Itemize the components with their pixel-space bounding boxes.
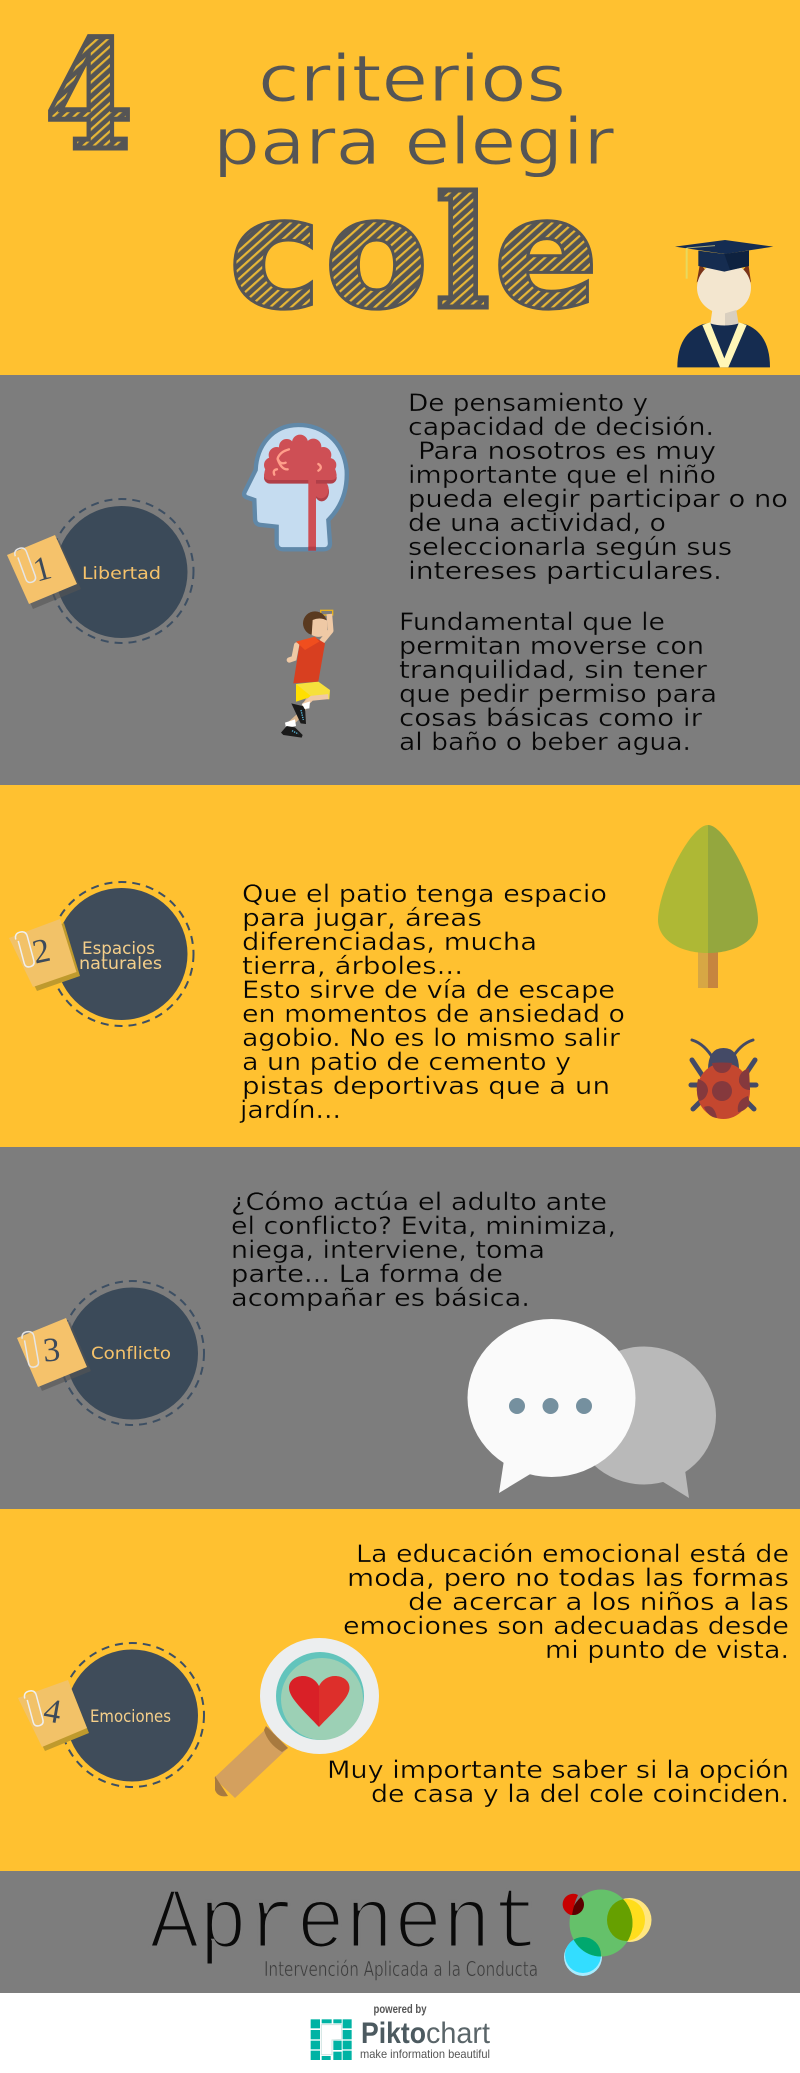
badge: Espacios naturales: Espacios bbox=[82, 939, 155, 959]
text: Que el patio: tierra, árboles... bbox=[242, 952, 463, 980]
big number 4: 4 bbox=[45, 8, 133, 184]
title line: para elegir: para elegir bbox=[213, 106, 615, 180]
text: De pensamiento: importante que el niño bbox=[408, 461, 716, 489]
text: De pensamiento: Para nosotros es muy bbox=[418, 437, 716, 465]
text: Muy importante bbox=[327, 1756, 789, 1808]
title word: cole: o bbox=[324, 165, 429, 344]
text: Cómo actúa bbox=[231, 1188, 616, 1312]
badge: Emociones bbox=[18, 1643, 204, 1787]
badge: Conflicto: 3 bbox=[41, 1331, 62, 1370]
icon: graduate bbox=[675, 240, 773, 367]
text: Cómo actúa: el conflicto? Evita, minimiza, bbox=[231, 1212, 616, 1240]
badge: Espacios naturales bbox=[9, 882, 194, 1026]
title line: criterios: criterios bbox=[258, 43, 566, 117]
text: La educación bbox=[343, 1540, 789, 1664]
text: Que el patio: a un patio de cemento y bbox=[242, 1048, 571, 1076]
panel: Piktochart credit bbox=[0, 1993, 800, 2073]
text: La educación: moda, pero no todas las formas bbox=[347, 1564, 789, 1592]
panel: 2 Espacios naturales bbox=[0, 785, 800, 1147]
text: Piktochart wordmark bbox=[361, 2017, 491, 2050]
icon: magnifier with heart bbox=[214, 1638, 379, 1798]
title word: cole: l bbox=[435, 163, 490, 344]
text: Fundamental: cosas básicas como ir bbox=[399, 704, 702, 732]
text: Muy importante: de casa y la del cole coinciden. bbox=[371, 1780, 789, 1808]
title word: cole: e bbox=[493, 165, 599, 344]
text: Fundamental: que pedir permiso para bbox=[399, 680, 717, 708]
badge: Libertad: Libertad bbox=[82, 564, 161, 584]
text: Que el patio: en momentos de ansiedad o bbox=[242, 1000, 625, 1028]
icon: ladybug bbox=[691, 1040, 756, 1119]
text: Fundamental: permitan moverse con bbox=[399, 632, 704, 660]
icon: speech bubbles bbox=[468, 1319, 716, 1498]
text: De pensamiento: seleccionarla según sus bbox=[408, 533, 732, 561]
text: Cómo actúa: parte... La forma de bbox=[231, 1260, 503, 1288]
text: Piktochart wordmark: Pikto bbox=[361, 2017, 426, 2050]
badge: Emociones: Emociones bbox=[90, 1707, 171, 1727]
badge: Conflicto: Conflicto bbox=[91, 1344, 171, 1364]
icon: tree bbox=[658, 825, 758, 988]
panel: Aprenent footer bbox=[0, 1871, 800, 1993]
text: La educación: emociones son adecuadas desde bbox=[343, 1612, 789, 1640]
text: Que el patio: jardín... bbox=[239, 1096, 341, 1124]
logo wordmark: Aprenent: Aprenent bbox=[150, 1875, 540, 1973]
text: Que el patio: Que el patio tenga espacio bbox=[242, 880, 607, 908]
icon: running boy bbox=[281, 610, 333, 738]
text: Piktochart wordmark: chart bbox=[426, 2017, 491, 2050]
badge: Emociones: 4 bbox=[41, 1692, 64, 1731]
text: Que el patio: diferenciadas, mucha bbox=[242, 928, 537, 956]
logo tagline: Intervención Aplicada a la Conducta bbox=[264, 1957, 538, 1981]
logo: coloured circles bbox=[563, 1890, 652, 1976]
panel: header bbox=[0, 0, 800, 375]
text: De pensamiento: De pensamiento y bbox=[408, 389, 648, 417]
badge: Conflicto bbox=[17, 1281, 204, 1425]
text: Fundamental bbox=[399, 608, 717, 756]
text: powered by: powered by bbox=[374, 2002, 427, 2016]
text: La educación: mi punto de vista. bbox=[545, 1636, 789, 1664]
text: De pensamiento: capacidad de decisión. bbox=[408, 413, 714, 441]
text: Cómo actúa: ¿Cómo actúa el adulto ante bbox=[231, 1188, 607, 1216]
text: Que el patio: pistas deportivas que a un bbox=[242, 1072, 610, 1100]
badge: Espacios naturales: 2 bbox=[29, 932, 54, 971]
text: Fundamental: tranquilidad, sin tener bbox=[399, 656, 707, 684]
panel: 3 Conflicto bbox=[0, 1147, 800, 1509]
panel: 1 Libertad bbox=[0, 375, 800, 785]
badge: Libertad: 1 bbox=[29, 549, 55, 589]
text: Que el patio: Esto sirve de vía de escape bbox=[242, 976, 615, 1004]
title word: cole: c bbox=[228, 165, 322, 344]
text: De pensamiento bbox=[408, 389, 788, 585]
text: De pensamiento: pueda elegir participar o no bbox=[408, 485, 788, 513]
text: De pensamiento: de una actividad, o bbox=[408, 509, 666, 537]
text: Muy importante: Muy importante saber si la opción bbox=[327, 1756, 789, 1784]
badge: Libertad bbox=[7, 499, 194, 643]
text: Fundamental: al baño o beber agua. bbox=[399, 728, 691, 756]
badge: Espacios naturales: naturales bbox=[79, 954, 162, 974]
text: make information beautiful: make information beautiful bbox=[360, 2047, 490, 2061]
text: Cómo actúa: acompañar es básica. bbox=[231, 1284, 530, 1312]
icon: head with brain bbox=[244, 425, 347, 551]
title word: cole bbox=[228, 163, 599, 344]
text: Que el patio: para jugar, áreas bbox=[242, 904, 482, 932]
text: Cómo actúa: niega, interviene, toma bbox=[231, 1236, 545, 1264]
text: Que el patio: agobio. No es lo mismo salir bbox=[242, 1024, 620, 1052]
panel: 4 Emociones bbox=[0, 1509, 800, 1871]
text: De pensamiento: intereses particulares. bbox=[408, 557, 722, 585]
text: Que el patio bbox=[239, 880, 625, 1124]
icon: Piktochart logo bbox=[311, 2019, 352, 2060]
text: La educación: de acercar a los niños a las bbox=[408, 1588, 789, 1616]
text: La educación: La educación emocional está de bbox=[356, 1540, 789, 1568]
text: Fundamental: Fundamental que le bbox=[399, 608, 665, 636]
